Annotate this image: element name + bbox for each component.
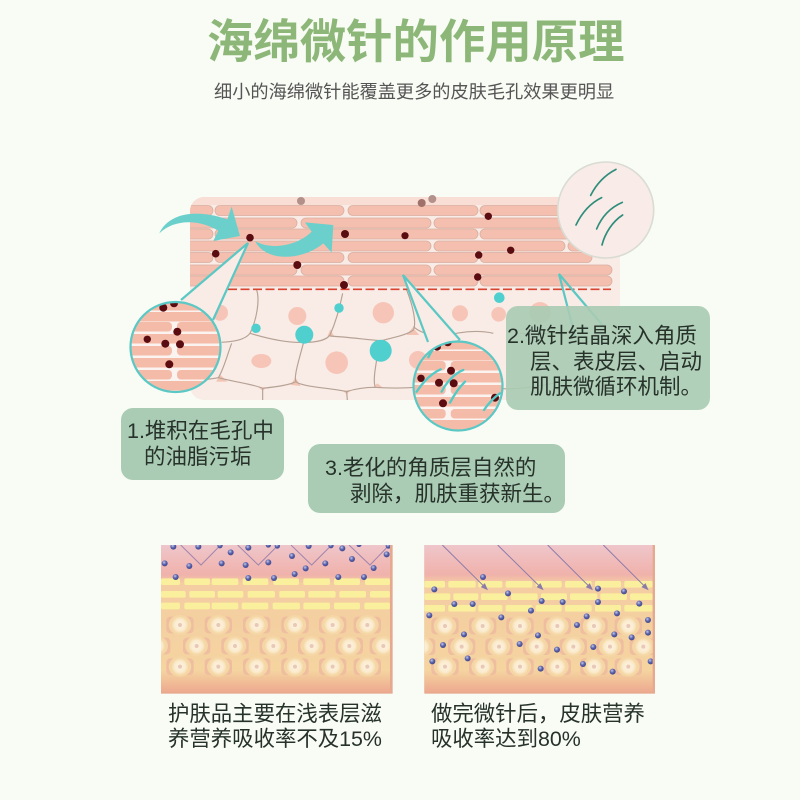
needle strokes	[576, 169, 623, 245]
caption: before: 养营养吸收率不及15%	[168, 727, 382, 751]
circle	[558, 162, 654, 258]
stratum corneum bars	[180, 197, 620, 286]
magnifier content	[132, 303, 220, 390]
caption: after: 吸收率达到80%	[431, 727, 581, 751]
caption: before: 护肤品主要在浅表层滋	[168, 702, 382, 726]
magnified microneedle circle	[558, 162, 654, 258]
callout 2 text: 2.微针结晶深入角质	[507, 324, 697, 348]
callout 1	[121, 408, 284, 480]
cell walls	[190, 290, 419, 400]
magnifier ring	[130, 302, 220, 392]
magnifier ring	[414, 342, 502, 430]
cell rows	[161, 616, 390, 676]
caption: before	[168, 702, 382, 751]
surface particles	[297, 195, 436, 207]
magnifier: sebum in pore	[129, 242, 249, 394]
nutrient particles	[162, 542, 391, 581]
callout 2 text: 肌肤微循环机制。	[530, 375, 702, 399]
skin layers	[161, 545, 390, 692]
needle slashes	[415, 350, 501, 412]
callout 2 text	[507, 324, 702, 399]
comparison panel: after	[408, 545, 657, 694]
penetrating needle arrows	[442, 545, 648, 589]
skin diagram	[180, 195, 620, 400]
magnifier cone outline	[181, 243, 248, 320]
wall junctions	[216, 327, 419, 394]
needle traces	[181, 545, 389, 565]
callout 3 text	[325, 456, 565, 506]
comparison panel: before	[161, 545, 393, 694]
panel shadow edge	[424, 545, 655, 694]
magnifier: needles in pore	[402, 274, 504, 432]
callout 3 text: 剥除，肌肤重获新生。	[350, 482, 565, 506]
callout 2 text: 层、表皮层、启动	[530, 350, 702, 374]
callout 1 text: 1.堆积在毛孔中	[127, 419, 274, 443]
caption: after	[431, 702, 645, 751]
skin tissue background	[190, 197, 620, 400]
red dashed boundary line	[228, 288, 611, 290]
callout 3 text: 3.老化的角质层自然的	[325, 456, 536, 480]
panel shadow edge	[161, 545, 393, 694]
cell rows	[424, 618, 653, 676]
magnifier cone outline	[403, 275, 460, 342]
callout 3	[308, 444, 565, 513]
magnifier cone	[181, 243, 248, 320]
nutrient particles	[426, 574, 654, 675]
yellow layers	[161, 578, 390, 609]
arrow: left curved	[159, 207, 240, 241]
callout 2	[506, 306, 710, 410]
callout 1 text: 的油脂污垢	[144, 445, 252, 469]
subtitle: 细小的海绵微针能覆盖更多的皮肤毛孔效果更明显	[214, 82, 614, 102]
callout 1 text	[127, 419, 274, 469]
wall lines	[190, 290, 417, 400]
caption: after: 做完微针后，皮肤营养	[431, 702, 645, 726]
right cell walls	[413, 327, 587, 395]
teal microneedle crystals	[251, 292, 505, 362]
arrow: right curved	[255, 222, 333, 257]
skin diagram and comparison illustrations	[129, 161, 655, 694]
dark sebum particles	[212, 213, 514, 289]
pointer lines to callout 2	[559, 274, 604, 336]
title: 海绵微针的作用原理	[207, 16, 625, 68]
cell nuclei	[212, 302, 551, 374]
skin layers	[424, 545, 653, 692]
magnifier content	[414, 342, 502, 430]
yellow layers	[424, 581, 653, 612]
